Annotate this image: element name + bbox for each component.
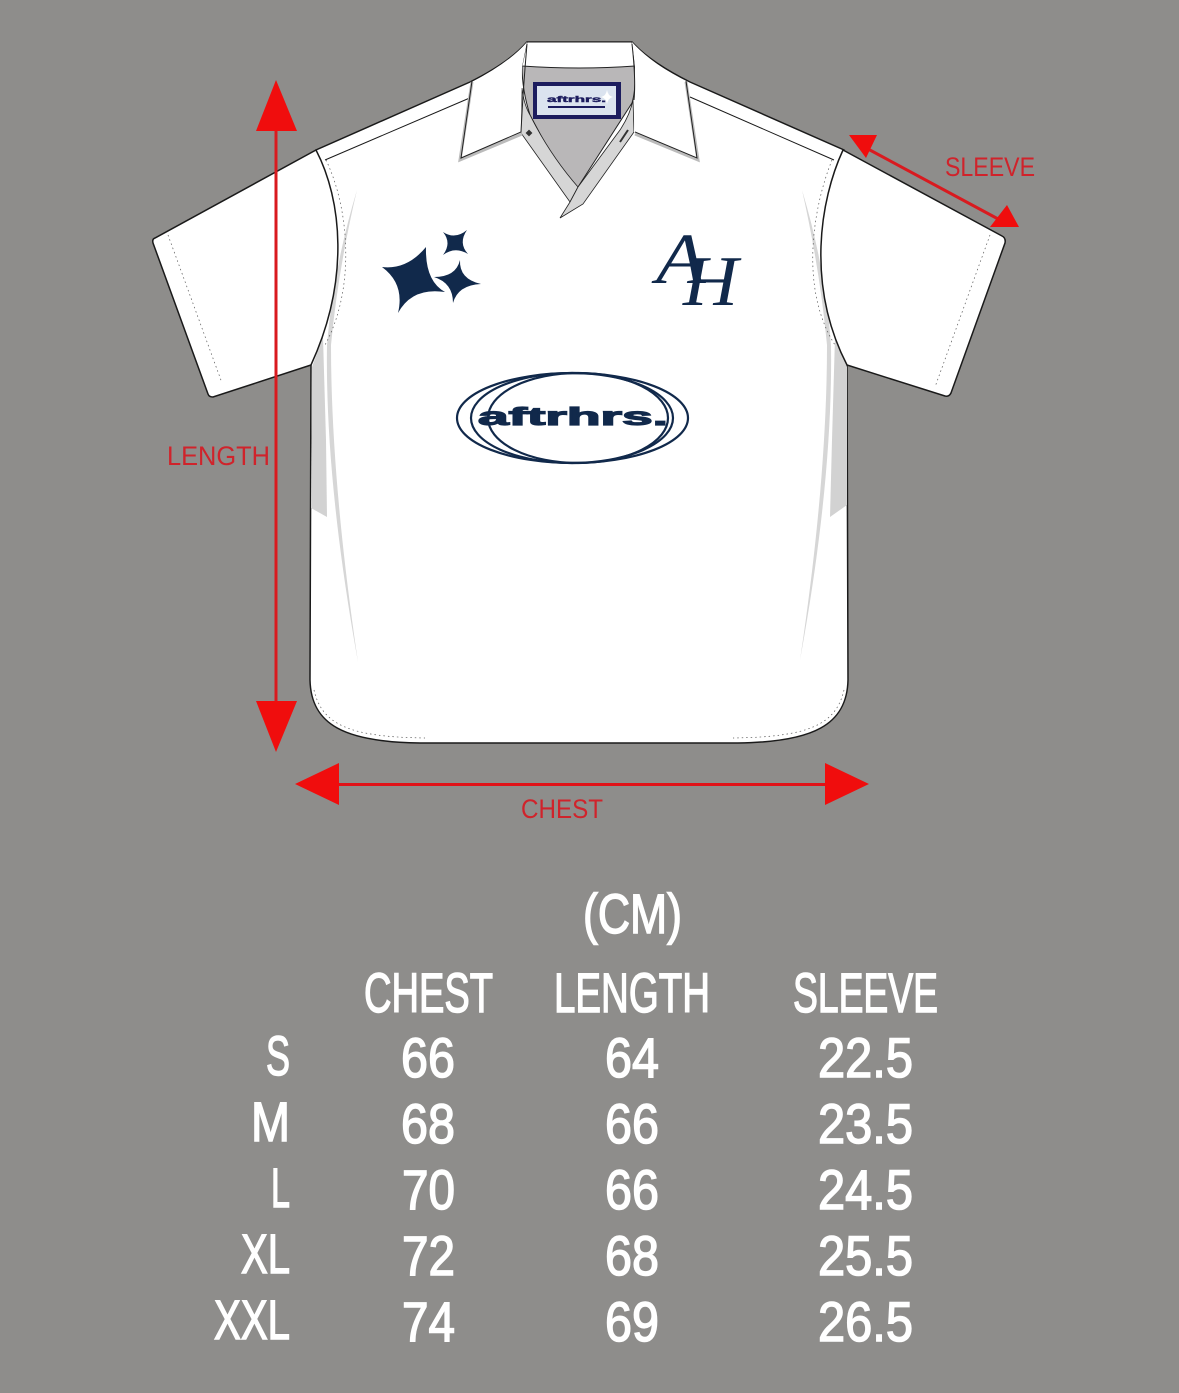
column headings: SLEEVE xyxy=(793,961,938,1024)
aftrhrs oval logo xyxy=(457,373,688,463)
collar left flap xyxy=(460,42,527,160)
row S xyxy=(266,1024,913,1089)
body fold left xyxy=(327,190,358,662)
size table xyxy=(214,882,938,1353)
body fold right xyxy=(800,190,831,660)
row S: 64 xyxy=(605,1026,659,1089)
collar right flap xyxy=(632,42,698,162)
stitching xyxy=(168,160,990,738)
row XXL xyxy=(214,1288,913,1353)
row XL: 72 xyxy=(402,1224,455,1287)
side shading left xyxy=(311,337,327,517)
collar back xyxy=(522,42,635,68)
side shading right xyxy=(830,337,847,517)
buttons xyxy=(527,130,628,142)
placket left xyxy=(521,88,578,202)
AH monogram: A xyxy=(651,219,707,299)
row M: M xyxy=(251,1090,290,1153)
shoulder seams xyxy=(325,97,834,160)
row S: 22.5 xyxy=(818,1026,913,1089)
row XXL: 74 xyxy=(402,1290,455,1353)
chest arrow xyxy=(295,763,869,805)
row S: S xyxy=(266,1024,290,1087)
AH monogram xyxy=(651,219,742,321)
row M: 68 xyxy=(401,1092,455,1155)
row L: 66 xyxy=(605,1158,659,1221)
sleeve label: SLEEVE xyxy=(945,152,1035,182)
length label: LENGTH xyxy=(167,441,270,471)
row M: 66 xyxy=(605,1092,659,1155)
aftrhrs oval logo: aftrhrs. xyxy=(478,403,668,431)
row M: 23.5 xyxy=(818,1092,913,1155)
collar inner xyxy=(522,66,635,190)
shirt diagram xyxy=(153,42,1005,743)
placket right xyxy=(560,100,634,218)
row L: 24.5 xyxy=(818,1158,913,1221)
right sleeve xyxy=(821,150,1005,396)
chest label: CHEST xyxy=(521,794,603,824)
row S: 66 xyxy=(401,1026,455,1089)
star logo xyxy=(382,230,481,313)
length arrow xyxy=(256,80,297,752)
neck label: aftrhrs. xyxy=(547,95,606,104)
row L: 70 xyxy=(402,1158,455,1221)
column headings xyxy=(364,961,938,1024)
row M xyxy=(251,1090,913,1155)
row XL: 68 xyxy=(605,1224,659,1287)
row XL: 25.5 xyxy=(818,1224,913,1287)
row L xyxy=(271,1156,913,1221)
shirt body xyxy=(310,42,848,743)
row XL: XL xyxy=(241,1222,290,1285)
column headings: LENGTH xyxy=(554,961,710,1024)
row XXL: 26.5 xyxy=(818,1290,913,1353)
column headings: CHEST xyxy=(364,961,493,1024)
left sleeve xyxy=(153,150,338,397)
neck label xyxy=(533,82,621,119)
row L: L xyxy=(271,1156,290,1219)
unit heading: (CM) xyxy=(583,882,682,945)
row XXL: 69 xyxy=(605,1290,659,1353)
row XXL: XXL xyxy=(214,1288,290,1351)
sleeve arrow xyxy=(849,135,1019,227)
row XL xyxy=(241,1222,913,1287)
AH monogram: H xyxy=(682,243,742,321)
